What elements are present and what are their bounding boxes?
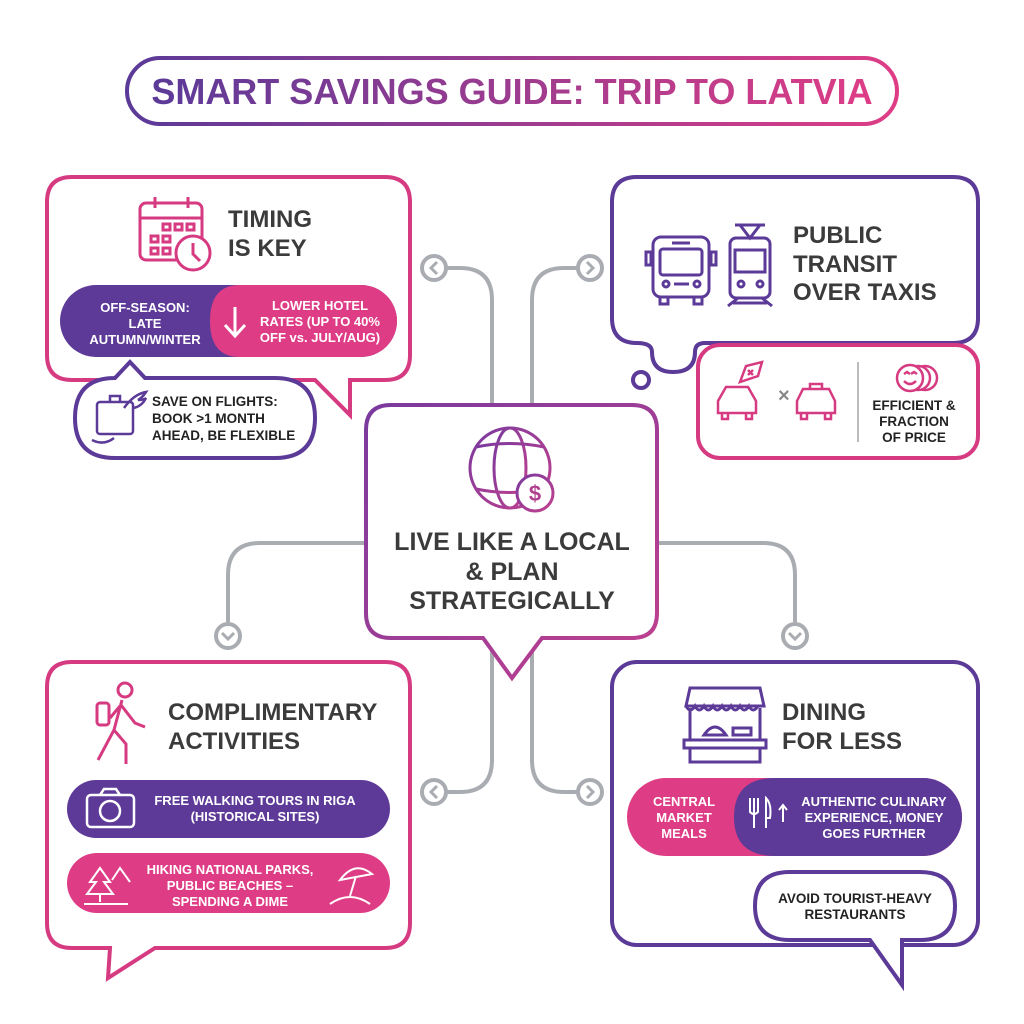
callout: flights: AHEAD, BE FLEXIBLE [152, 428, 295, 443]
pill: hiking: SPENDING A DIME [172, 894, 288, 909]
pill: central market [627, 778, 962, 856]
connector nodes [216, 256, 807, 804]
pill: walking tours: FREE WALKING TOURS IN RIGA [154, 793, 356, 808]
panel: dining: FOR LESS [782, 728, 902, 755]
pill: central market: CENTRAL [653, 794, 715, 809]
pill: off-season: AUTUMN/WINTER [89, 332, 201, 347]
icon: winged suitcase [92, 392, 146, 443]
panel: transit: PUBLIC [793, 222, 882, 249]
pill: off-season: OFF vs. JULY/AUG) [260, 330, 380, 345]
pill: off-season: OFF-SEASON: [100, 300, 190, 315]
panel: transit comparison: FRACTION [879, 414, 949, 429]
panel: center: STRATEGICALLY [409, 587, 615, 615]
callout: avoid tourist restaurants: RESTAURANTS [804, 907, 906, 922]
pill: off-season: RATES (UP TO 40% [260, 314, 380, 329]
heading: TIMING [228, 206, 312, 233]
icon: market stall [684, 688, 766, 762]
panel: complimentary activities: COMPLIMENTARY [168, 699, 377, 726]
panel: complimentary activities [47, 662, 410, 978]
pill: walking tours: (HISTORICAL SITES) [191, 809, 319, 824]
panel: dining: DINING [782, 699, 866, 726]
panel: transit: TRANSIT [793, 251, 897, 278]
pill: central market: GOES FURTHER [822, 826, 926, 841]
panel: transit [612, 177, 978, 388]
callout: flights: BOOK >1 MONTH [152, 411, 265, 426]
panel: dining [612, 662, 978, 945]
pill: central market: EXPERIENCE, MONEY [805, 810, 944, 825]
pill: hiking: PUBLIC BEACHES – [167, 878, 293, 893]
icon: cars [718, 362, 835, 419]
pill: walking tours [67, 780, 390, 838]
callout: avoid tourist restaurants [755, 872, 955, 985]
icon: bus and tram [646, 225, 772, 306]
panel: center [366, 405, 657, 678]
panel: transit comparison: × [778, 385, 790, 407]
pill: central market: MEALS [661, 826, 707, 841]
panel: transit comparison [698, 345, 978, 458]
title: SMART SAVINGS GUIDE: TRIP TO LATVIA [151, 71, 873, 112]
pill: central market: AUTHENTIC CULINARY [801, 794, 947, 809]
pill: off-season [60, 285, 397, 357]
panel: center: $ [529, 481, 541, 506]
panel: center: LIVE LIKE A LOCAL [394, 528, 630, 556]
panel: transit comparison: OF PRICE [882, 430, 946, 445]
pill: hiking: HIKING NATIONAL PARKS, [147, 862, 313, 877]
icon: globe with dollar [470, 428, 553, 511]
icon: smiling coins [897, 365, 937, 391]
panel: timing [47, 177, 410, 415]
callout: flights [75, 362, 315, 458]
title [127, 58, 897, 124]
pill: off-season: LOWER HOTEL [272, 298, 368, 313]
pill: hiking [67, 853, 390, 913]
connectors [228, 268, 795, 792]
pill: off-season: LATE [129, 316, 162, 331]
icon: hiker [97, 683, 145, 764]
pill: central market: MARKET [656, 810, 712, 825]
panel: transit comparison: EFFICIENT & [872, 398, 956, 413]
panel: complimentary activities: ACTIVITIES [168, 728, 300, 755]
panel: transit: OVER TAXIS [793, 279, 937, 306]
icon: calendar clock [140, 197, 210, 270]
panel: center: & PLAN [465, 558, 559, 586]
panel: timing: IS KEY [228, 235, 307, 262]
callout: flights: SAVE ON FLIGHTS: [152, 394, 278, 409]
callout: avoid tourist restaurants: AVOID TOURIST-HEAVY [778, 891, 932, 906]
